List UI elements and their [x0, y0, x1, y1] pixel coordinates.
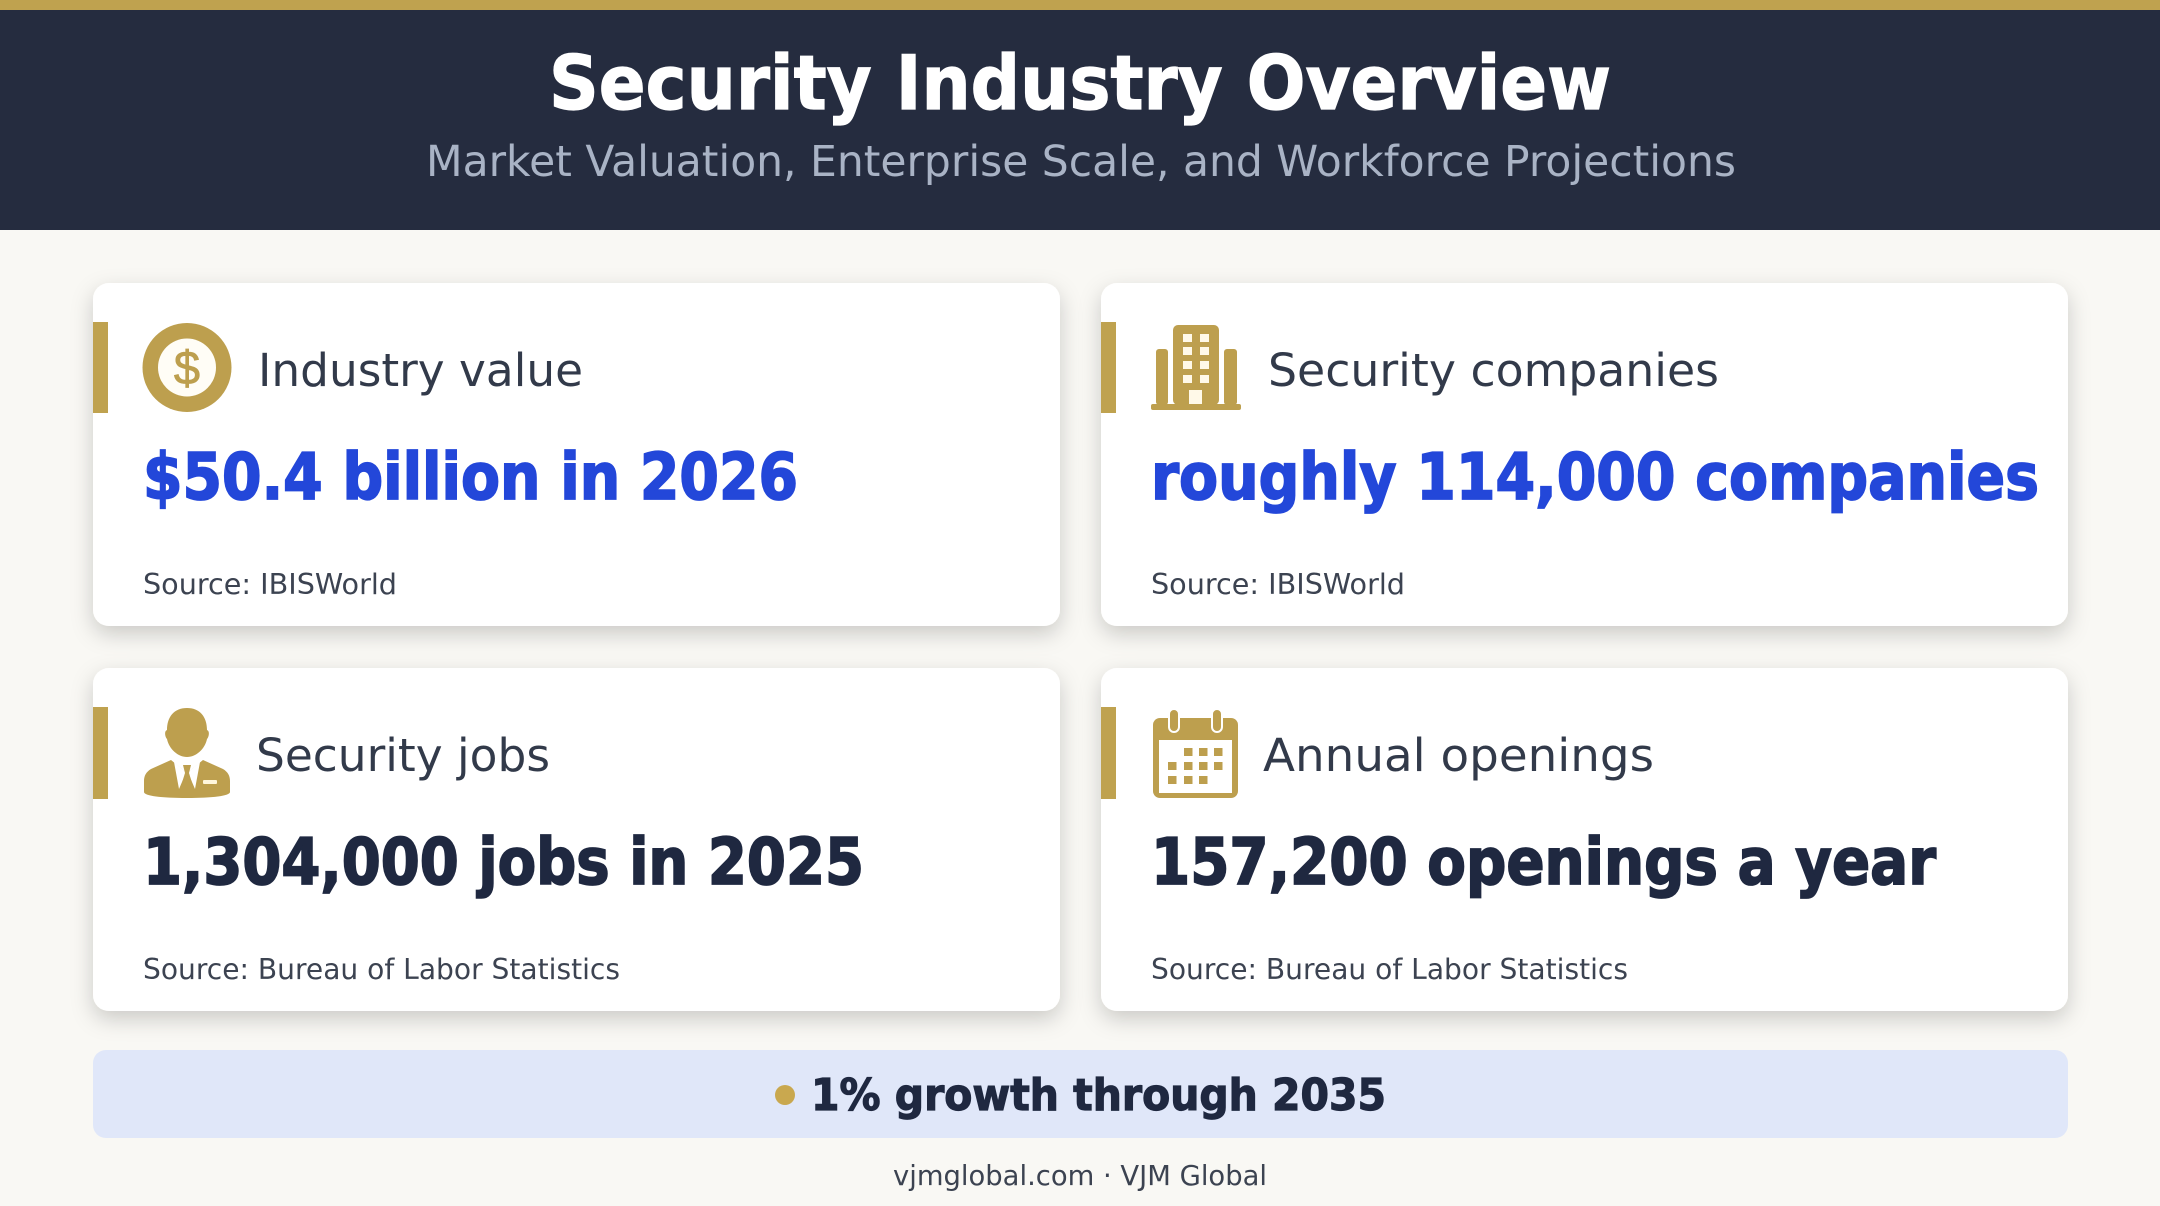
- icon: dollar coin: $: [174, 341, 200, 394]
- header band: [0, 0, 2160, 230]
- source: Source: Bureau of Labor Statistics: [143, 953, 620, 986]
- value: annual openings: 157,200 openings a year: [1151, 826, 1936, 900]
- label: annual openings: Annual openings: [1263, 729, 1654, 782]
- panel: security jobs: [93, 668, 1060, 1011]
- icon: office building: [1151, 325, 1241, 410]
- label: security companies: Security companies: [1268, 344, 1719, 397]
- icon: dollar coin: [142, 323, 232, 412]
- value: industry value: $50.4 billion in 2026: [143, 441, 798, 515]
- source: Source: IBISWorld: [1151, 568, 1405, 601]
- label: industry value: Industry value: [258, 344, 583, 397]
- callout: growth banner: [93, 1050, 2068, 1138]
- panel: security companies: [1101, 283, 2068, 626]
- source: Source: IBISWorld: [143, 568, 397, 601]
- source: Source: Bureau of Labor Statistics: [1151, 953, 1628, 986]
- icon: person in suit: [144, 708, 230, 798]
- icon: calendar: [1153, 709, 1238, 798]
- panel: annual openings: [1101, 668, 2068, 1011]
- growth text: 1% growth through 2035: [811, 1070, 1386, 1121]
- value: security companies: roughly 114,000 companies: [1151, 441, 2039, 515]
- label: security jobs: Security jobs: [256, 729, 550, 782]
- panel: industry value: [93, 283, 1060, 626]
- bullet dot: [775, 1085, 795, 1105]
- value: security jobs: 1,304,000 jobs in 2025: [143, 826, 864, 900]
- subtitle: Market Valuation, Enterprise Scale, and Workforce Projections: [426, 137, 1736, 187]
- title: Security Industry Overview: [549, 39, 1611, 127]
- footer credit: vjmglobal.com · VJM Global: [893, 1159, 1267, 1192]
